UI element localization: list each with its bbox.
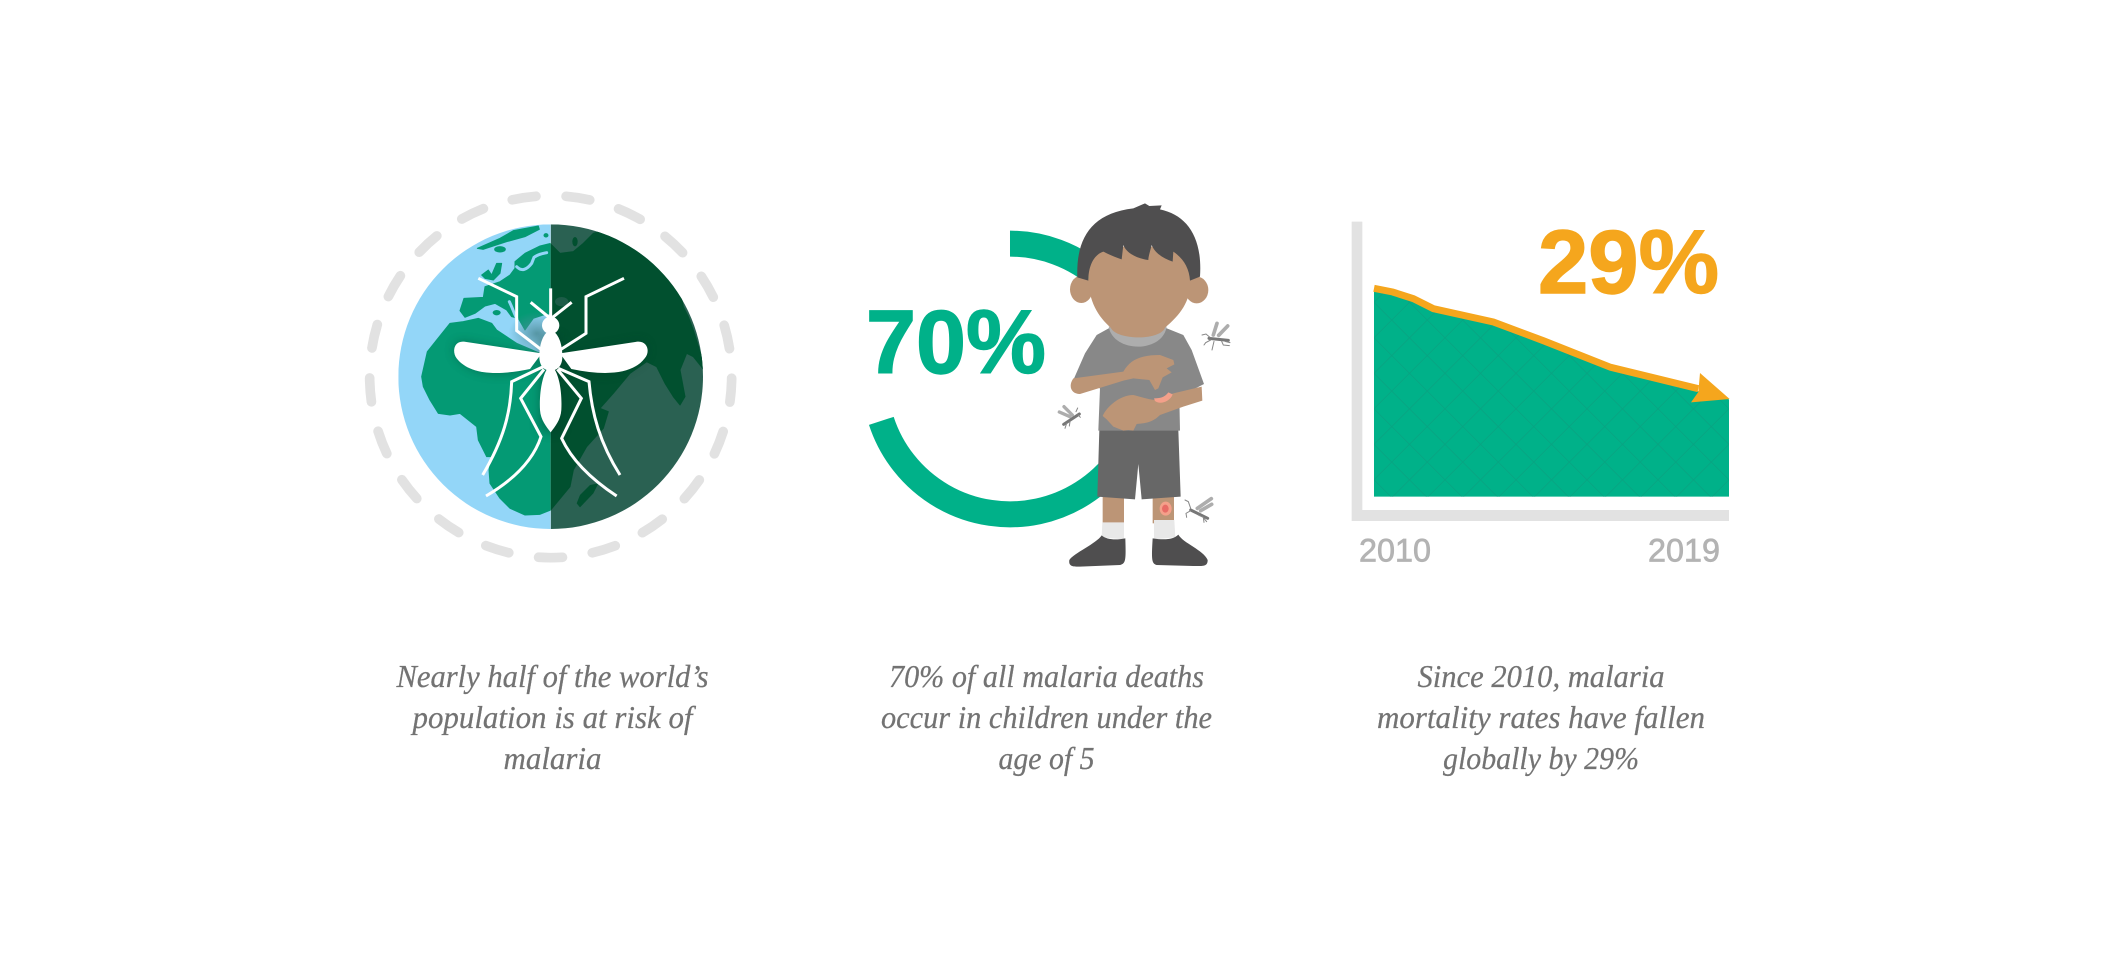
icon: mosquito left (1059, 407, 1080, 428)
caption: child deaths: 70% of all malaria deaths (889, 658, 1204, 694)
leg wound (1160, 502, 1172, 516)
caption: world at risk: Nearly half of the world’s (396, 658, 708, 694)
axis label: 2010: 2010 (1359, 532, 1431, 568)
globe (397, 220, 707, 533)
legs (1103, 495, 1174, 525)
arm: upper (1071, 355, 1174, 394)
caption: mortality decline (1377, 658, 1705, 776)
caption: world at risk (396, 658, 708, 776)
globe: night half (551, 220, 707, 533)
donut arc 70 percent (881, 244, 1145, 514)
caption: mortality decline: mortality rates have fallen (1377, 699, 1705, 735)
dashed ring (370, 196, 732, 558)
face (1088, 247, 1191, 337)
caption: mortality decline: globally by 29% (1443, 740, 1639, 776)
socks (1102, 520, 1175, 539)
panel: world at risk (370, 196, 732, 558)
caption: child deaths: occur in children under the (881, 699, 1212, 735)
caption: mortality decline: Since 2010, malaria (1418, 658, 1664, 694)
panel: child deaths (881, 203, 1230, 567)
icon: mosquito upper right (1202, 323, 1230, 350)
hair (1077, 203, 1200, 281)
shorts (1097, 430, 1181, 499)
ears (1070, 276, 1208, 303)
stat: 70%: 70% (866, 293, 1046, 393)
panel: mortality decline chart (1352, 222, 1730, 521)
caption: world at risk: population is at risk of (411, 699, 696, 735)
chart axes (1352, 222, 1729, 521)
arm: lower (1103, 387, 1202, 431)
globe: lit half (398, 224, 551, 529)
area chart (1374, 289, 1729, 497)
icon: mosquito (454, 278, 648, 496)
mosquito shadow (455, 337, 647, 432)
caption: child deaths: age of 5 (998, 740, 1094, 776)
collar (1109, 327, 1167, 347)
shirt (1073, 328, 1204, 431)
trend arrow (1374, 288, 1730, 402)
axis label: 2019: 2019 (1648, 532, 1720, 568)
illustration: boy (1069, 203, 1208, 567)
stat: 29%: 29% (1538, 213, 1719, 313)
icon: mosquito lower right (1185, 499, 1212, 522)
caption: child deaths (881, 658, 1212, 776)
caption: world at risk: malaria (504, 740, 602, 776)
arm wound (1154, 392, 1173, 403)
shoes (1069, 535, 1208, 567)
